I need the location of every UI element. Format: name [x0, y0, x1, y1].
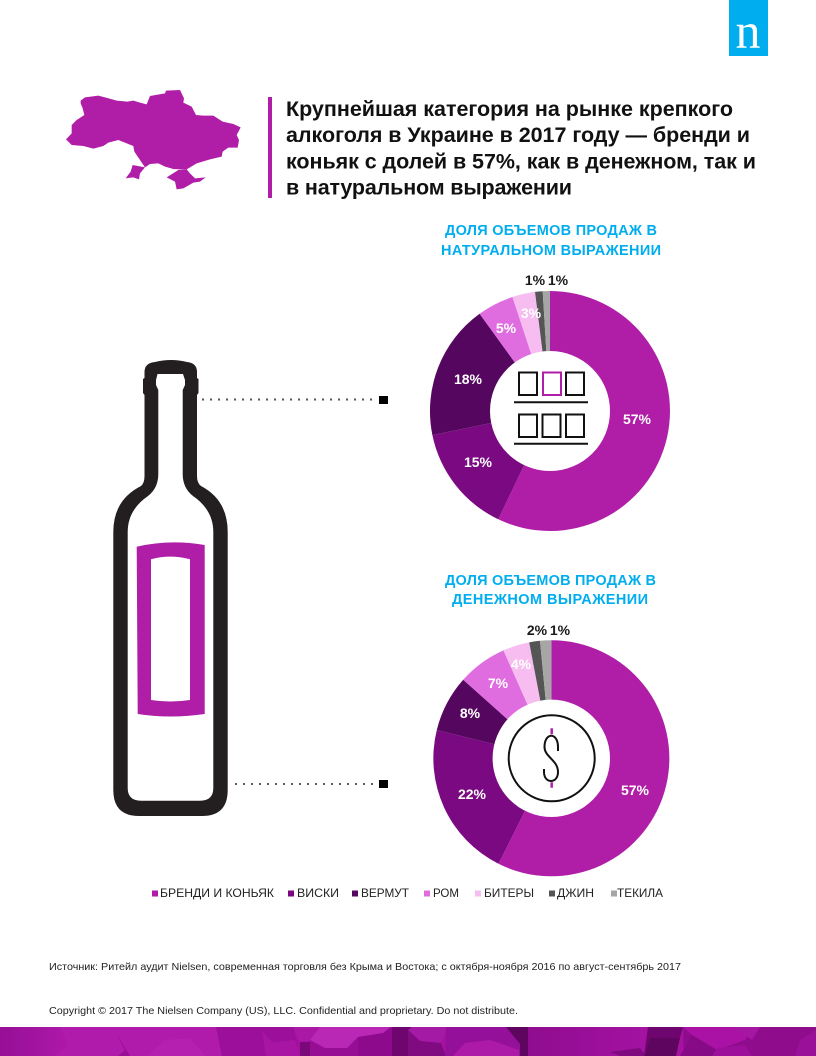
- donut chart: value share: 7%: [488, 675, 509, 691]
- heading: volume share: [441, 223, 661, 259]
- donut chart: volume share: 1%: [525, 272, 546, 288]
- heading: value share: ДОЛЯ ОБЪЕМОВ ПРОДАЖ В: [445, 573, 656, 589]
- donut chart: value share: [433, 622, 669, 876]
- donut chart: value share: 2%: [527, 622, 548, 638]
- title block: [268, 97, 756, 200]
- title block: Крупнейшая категория на рынке крепкого: [286, 97, 733, 121]
- footer band: [0, 1027, 816, 1056]
- donut chart: volume share: [430, 272, 670, 531]
- donut chart: value share: 1%: [550, 622, 571, 638]
- heading: volume share: ДОЛЯ ОБЪЕМОВ ПРОДАЖ В: [445, 223, 657, 239]
- title block: коньяк с долей в 57%, как в денежном, так и: [286, 150, 756, 174]
- donut chart: volume share: 3%: [521, 305, 542, 321]
- legend: БИТЕРЫ: [484, 886, 534, 900]
- icon: bottle: [113, 360, 228, 816]
- legend: [152, 886, 663, 900]
- icon: bottle crates: [514, 372, 588, 444]
- heading: value share: ДЕНЕЖНОМ ВЫРАЖЕНИИ: [452, 592, 648, 608]
- legend: РОМ: [433, 886, 459, 900]
- donut chart: value share: 22%: [458, 786, 487, 802]
- legend: БРЕНДИ И КОНЬЯК: [160, 886, 274, 900]
- source note: Источник: Ритейл аудит Nielsen, современная торговля без Крыма и Востока; с октября-ноября 2016 по август-сентябрь 2017: [49, 961, 681, 973]
- donut chart: value share: 57%: [621, 782, 650, 798]
- donut chart: volume share: 18%: [454, 371, 483, 387]
- title block: в натуральном выражении: [286, 176, 572, 200]
- legend: ТЕКИЛА: [617, 886, 663, 900]
- logo: Nielsen: n: [736, 3, 760, 59]
- legend: ВЕРМУТ: [361, 886, 410, 900]
- icon: map of Ukraine: [66, 90, 241, 189]
- heading: volume share: НАТУРАЛЬНОМ ВЫРАЖЕНИИ: [441, 243, 661, 259]
- legend: ВИСКИ: [297, 886, 339, 900]
- title block: алкоголя в Украине в 2017 году — бренди и: [286, 123, 750, 147]
- icon: dollar coin: [509, 715, 595, 801]
- donut chart: volume share: 1%: [548, 272, 569, 288]
- donut chart: value share: 4%: [511, 656, 532, 672]
- copyright: Copyright © 2017 The Nielsen Company (US), LLC. Confidential and proprietary. Do not distribute.: [49, 1005, 518, 1017]
- leader line: value: [235, 780, 388, 788]
- donut chart: volume share: 57%: [623, 411, 652, 427]
- legend: ДЖИН: [557, 886, 594, 900]
- bottle label: [137, 542, 205, 716]
- donut chart: volume share: 5%: [496, 320, 517, 336]
- leader line: volume: [202, 396, 388, 404]
- logo: Nielsen: [729, 0, 768, 59]
- donut chart: volume share: 15%: [464, 454, 493, 470]
- heading: value share: [445, 573, 656, 608]
- donut chart: value share: 8%: [460, 705, 481, 721]
